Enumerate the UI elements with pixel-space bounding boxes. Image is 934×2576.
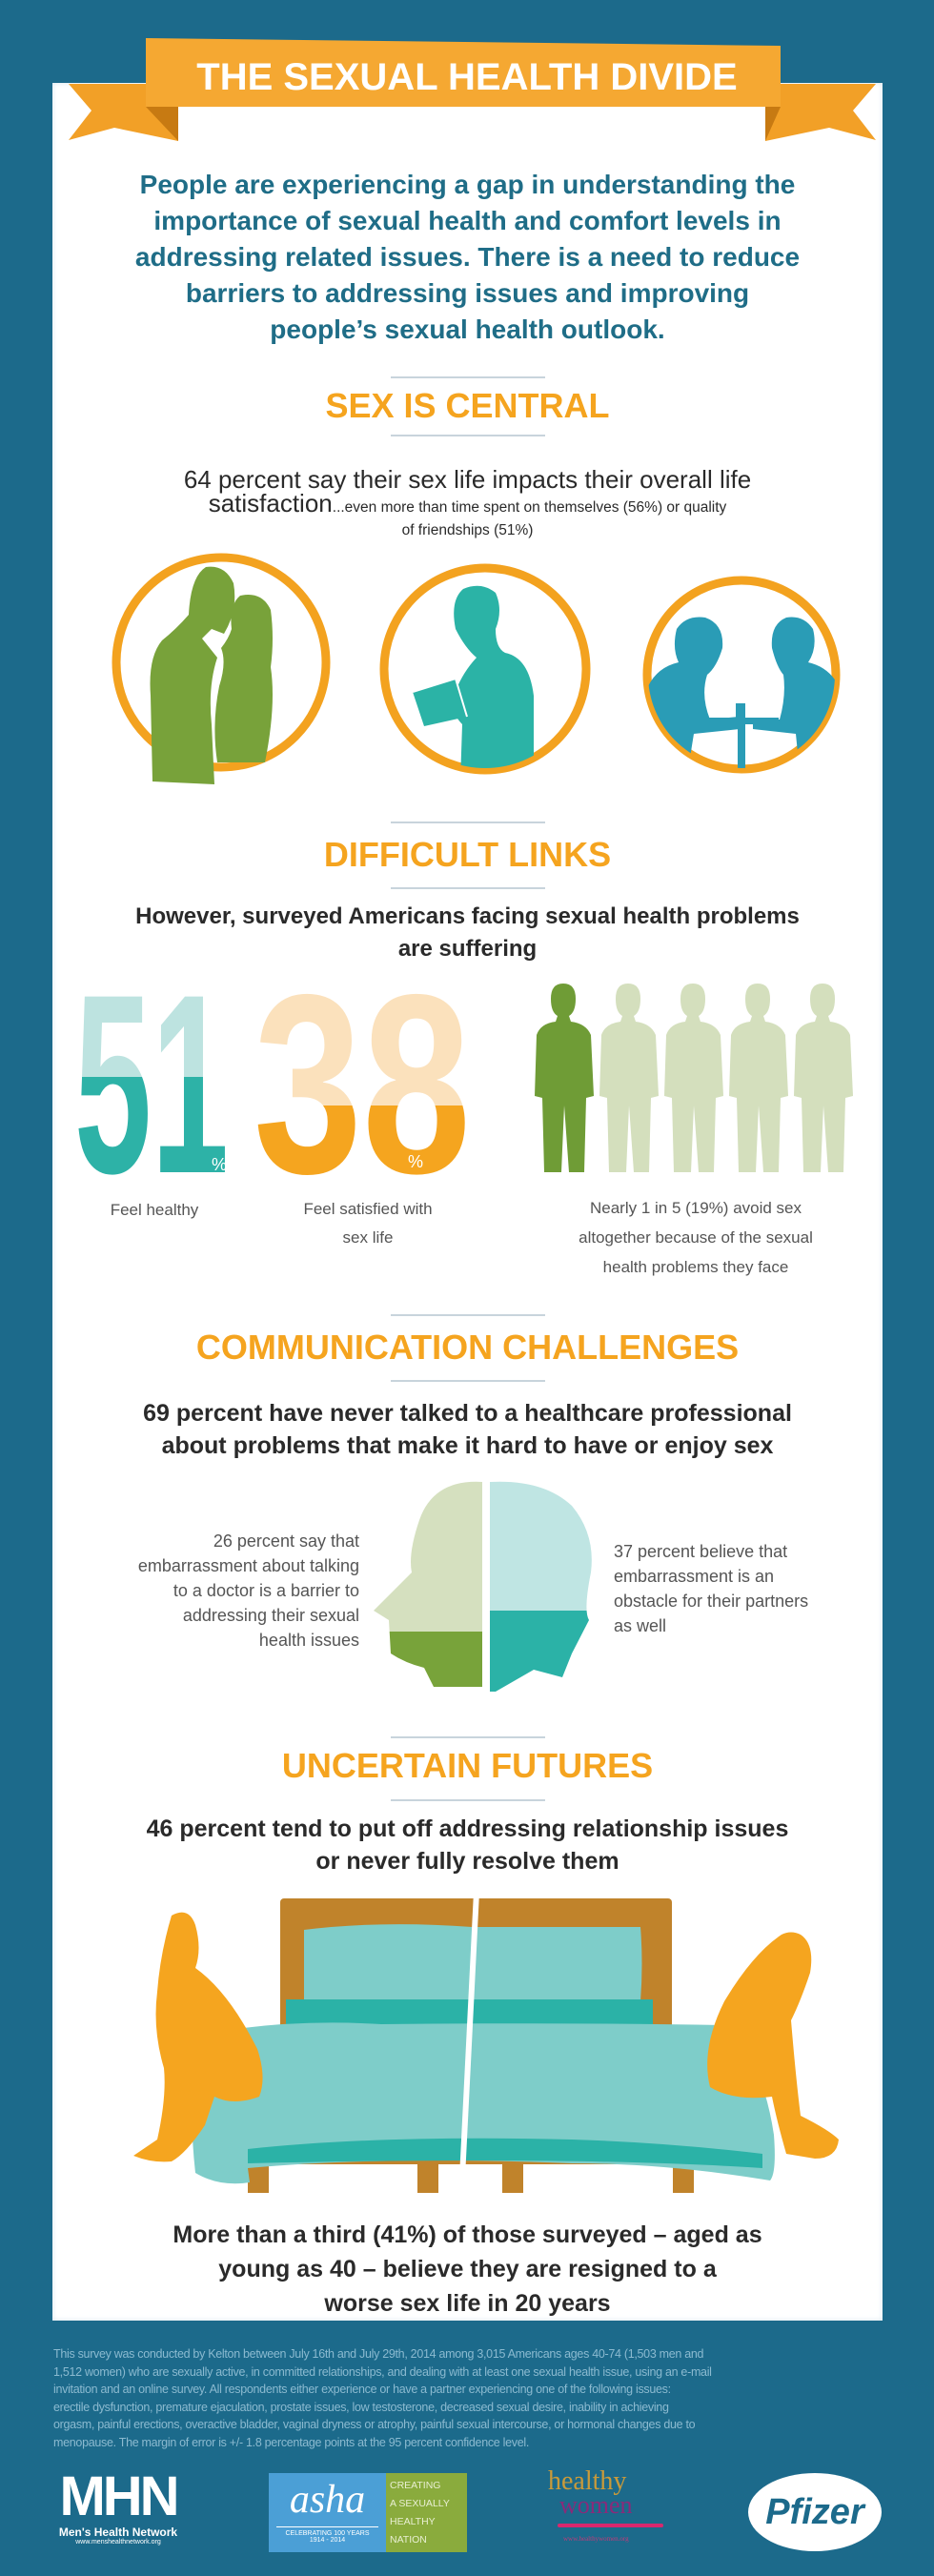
disclaimer: menopause. The margin of error is +/- 1.8 percentage points at the 95 percent confidence level.	[53, 2436, 529, 2449]
text: 37 percent: as well	[614, 1616, 666, 1635]
title ribbon: THE SEXUAL HEALTH DIVIDE	[196, 56, 738, 98]
text: however surveyed: However, surveyed Americans facing sexual health problems	[135, 903, 800, 929]
text: 46 percent	[147, 1815, 788, 1875]
text: 46 percent: or never fully resolve them	[315, 1848, 619, 1875]
white panel	[52, 83, 883, 2321]
stat 51%: %	[212, 1155, 227, 1174]
text: 26 percent: embarrassment about talking	[138, 1556, 359, 1575]
text: 46 percent: 46 percent tend to put off addressing relationship issues	[147, 1815, 788, 1842]
heading: communication challenges: COMMUNICATION CHALLENGES	[196, 1328, 739, 1367]
logo: asha: HEALTHY	[390, 2516, 436, 2527]
intro text: importance of sexual health and comfort levels in	[153, 206, 782, 235]
text: however surveyed: are suffering	[398, 936, 537, 962]
icon: couple	[116, 558, 326, 784]
text: 37 percent: obstacle for their partners	[614, 1592, 808, 1611]
text: 69 percent: about problems that make it hard to have or enjoy sex	[162, 1432, 773, 1459]
figure right	[707, 1933, 839, 2159]
text: 26 percent: 26 percent say that	[213, 1531, 359, 1551]
text: 26 percent	[138, 1531, 359, 1650]
text: 26 percent: health issues	[259, 1631, 359, 1650]
text: 64 percent: 64 percent say their sex life impacts their overall life	[184, 465, 751, 494]
disclaimer: orgasm, painful erections, overactive bladder, vaginal dryness or atrophy, painful sexual intercourse, or hormonal changes due to	[53, 2418, 695, 2431]
icon: man reading	[384, 568, 586, 781]
logo: asha: 1914 - 2014	[310, 2537, 345, 2544]
logo: asha: CREATING	[390, 2480, 440, 2491]
logo: healthywomen: women	[559, 2491, 633, 2519]
text: more than a third	[173, 2221, 762, 2317]
logo: healthywomen: www.healthywomen.org	[563, 2535, 629, 2543]
heading: uncertain futures: UNCERTAIN FUTURES	[282, 1746, 653, 1785]
text: 37 percent: 37 percent believe that	[614, 1542, 787, 1561]
label: avoid sex: health problems they face	[603, 1258, 788, 1276]
logo: healthywomen	[548, 2466, 663, 2543]
intro text: people’s sexual health outlook.	[270, 314, 665, 344]
title ribbon	[69, 38, 876, 141]
logo: asha	[269, 2473, 467, 2552]
heads illustration	[374, 1481, 592, 1692]
logo: MHN: MHN	[59, 2465, 177, 2527]
stat 38%: %	[408, 1152, 423, 1171]
logo: MHN: Men's Health Network	[59, 2525, 177, 2539]
label: avoid sex	[579, 1199, 813, 1276]
label: feel satisfied: sex life	[343, 1228, 393, 1247]
text: satisfaction...even more than time spent on themselves (56%) or quality	[209, 489, 726, 517]
bed illustration	[133, 1898, 839, 2193]
disclaimer: erectile dysfunction, premature ejaculation, prostate issues, low testosterone, decreased sexual desire, inability in achieving	[53, 2400, 669, 2413]
icon: two people at table	[647, 580, 839, 781]
logo: asha: A SEXUALLY	[390, 2498, 450, 2509]
logo: pfizer	[748, 2473, 882, 2551]
figure left	[133, 1913, 263, 2161]
intro text	[135, 170, 800, 344]
logo: pfizer: Pfizer	[765, 2492, 864, 2532]
disclaimer	[53, 2347, 712, 2449]
text: 26 percent: to a doctor is a barrier to	[173, 1581, 359, 1600]
text: more than a third: More than a third (41%) of those surveyed – aged as	[173, 2221, 762, 2248]
text: 26 percent: addressing their sexual	[183, 1606, 359, 1625]
logo: asha: CELEBRATING 100 YEARS	[285, 2530, 370, 2537]
text: 69 percent	[143, 1400, 792, 1459]
label: feel healthy: Feel healthy	[111, 1201, 198, 1219]
text: 69 percent: 69 percent have never talked to a healthcare professional	[143, 1400, 792, 1427]
text: more than a third: young as 40 – believe they are resigned to a	[218, 2256, 717, 2282]
intro text: People are experiencing a gap in understanding the	[140, 170, 795, 199]
text: more than a third: worse sex life in 20 years	[324, 2290, 611, 2317]
text: of friendships (51%)	[402, 522, 533, 538]
label: feel satisfied: Feel satisfied with	[303, 1200, 433, 1218]
label: feel satisfied	[303, 1200, 433, 1247]
disclaimer: invitation and an online survey. All respondents either experience or have a partner experiencing one of the following issues:	[53, 2383, 671, 2396]
logo: MHN: www.menshealthnetwork.org	[75, 2539, 161, 2546]
people: 1 in 5	[535, 984, 853, 1172]
text: 37 percent	[614, 1542, 808, 1635]
logo: asha: NATION	[390, 2534, 427, 2546]
text: 37 percent: embarrassment is an	[614, 1567, 774, 1586]
intro text: barriers to addressing issues and improving	[186, 278, 749, 308]
intro text: addressing related issues. There is a need to reduce	[135, 242, 800, 272]
text: however surveyed	[135, 903, 800, 962]
heading: sex is central: SEX IS CENTRAL	[325, 386, 610, 425]
heading: difficult links: DIFFICULT LINKS	[324, 835, 611, 874]
logo: asha: asha	[290, 2478, 365, 2522]
disclaimer: 1,512 women) who are sexually active, in committed relationships, and dealing with at least one sexual health issue, using an e-mail	[53, 2365, 712, 2379]
logo: healthywomen: healthy	[548, 2466, 626, 2496]
disclaimer: This survey was conducted by Kelton between July 16th and July 29th, 2014 among 3,015 Americans ages 40-74 (1,503 men and	[53, 2347, 703, 2361]
icon circles	[112, 553, 841, 784]
label: avoid sex: Nearly 1 in 5 (19%) avoid sex	[590, 1199, 802, 1217]
label: avoid sex: altogether because of the sexual	[579, 1228, 813, 1247]
